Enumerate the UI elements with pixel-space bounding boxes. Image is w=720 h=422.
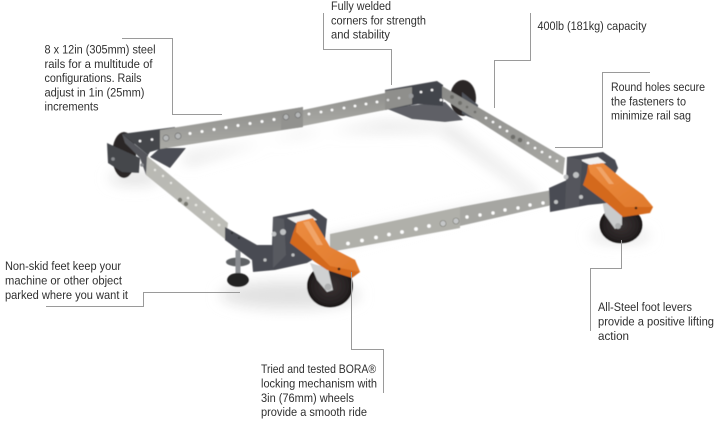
callout: non-skid feet — [5, 259, 129, 302]
callout: foot levers: All-Steel foot levers — [598, 300, 692, 314]
right rail — [442, 86, 565, 175]
callout: locking mechanism: provide a smooth ride — [261, 405, 367, 419]
callout: foot levers — [598, 300, 714, 343]
callout: locking mechanism: Tried and tested BORA® — [261, 362, 376, 376]
front-right orange foot lever — [583, 163, 653, 217]
callout: steel rails: increments — [44, 100, 98, 114]
back-left wheel and bracket — [107, 127, 186, 178]
callout: welded corners — [331, 0, 426, 42]
callout: round holes — [611, 80, 705, 123]
callout: steel rails: adjust in 1in (25mm) — [44, 85, 144, 99]
callout: foot levers: action — [598, 329, 629, 343]
floor shadows — [109, 122, 650, 309]
leader lines — [46, 13, 650, 393]
callout: steel rails: rails for a multitude of — [44, 57, 153, 71]
front-right bracket — [549, 152, 618, 212]
front-left wheel and caster — [307, 263, 353, 308]
callout: welded corners: and stability — [331, 28, 391, 42]
callout: non-skid feet: parked where you want it — [5, 288, 129, 302]
callout: steel rails — [44, 42, 156, 114]
levelling foot — [226, 250, 250, 287]
front-right wheel and caster — [600, 200, 642, 244]
callout: steel rails: 8 x 12in (305mm) steel — [44, 42, 156, 56]
callout: capacity: 400lb (181kg) capacity — [538, 19, 647, 33]
callout: round holes: the fasteners to — [611, 94, 686, 108]
callout: non-skid feet: machine or other object — [5, 273, 123, 287]
back-right wheel and welded corner — [385, 80, 478, 122]
callout: non-skid feet: Non-skid feet keep your — [5, 259, 121, 273]
callout: steel rails: configurations. Rails — [44, 71, 142, 85]
front-left bracket — [225, 209, 330, 272]
callout: locking mechanism: 3in (76mm) wheels — [261, 391, 354, 405]
back rail — [160, 93, 385, 149]
front-left orange foot lever — [290, 218, 360, 278]
callout: round holes: Round holes secure — [611, 80, 705, 94]
callout: locking mechanism — [261, 362, 377, 419]
callout: locking mechanism: locking mechanism with — [261, 376, 377, 390]
product photo: adjustable mobile base — [107, 80, 653, 309]
left rail — [146, 156, 228, 240]
callout: round holes: minimize rail sag — [611, 109, 691, 123]
callout: welded corners: corners for strength — [331, 13, 426, 27]
front rail — [330, 190, 552, 252]
